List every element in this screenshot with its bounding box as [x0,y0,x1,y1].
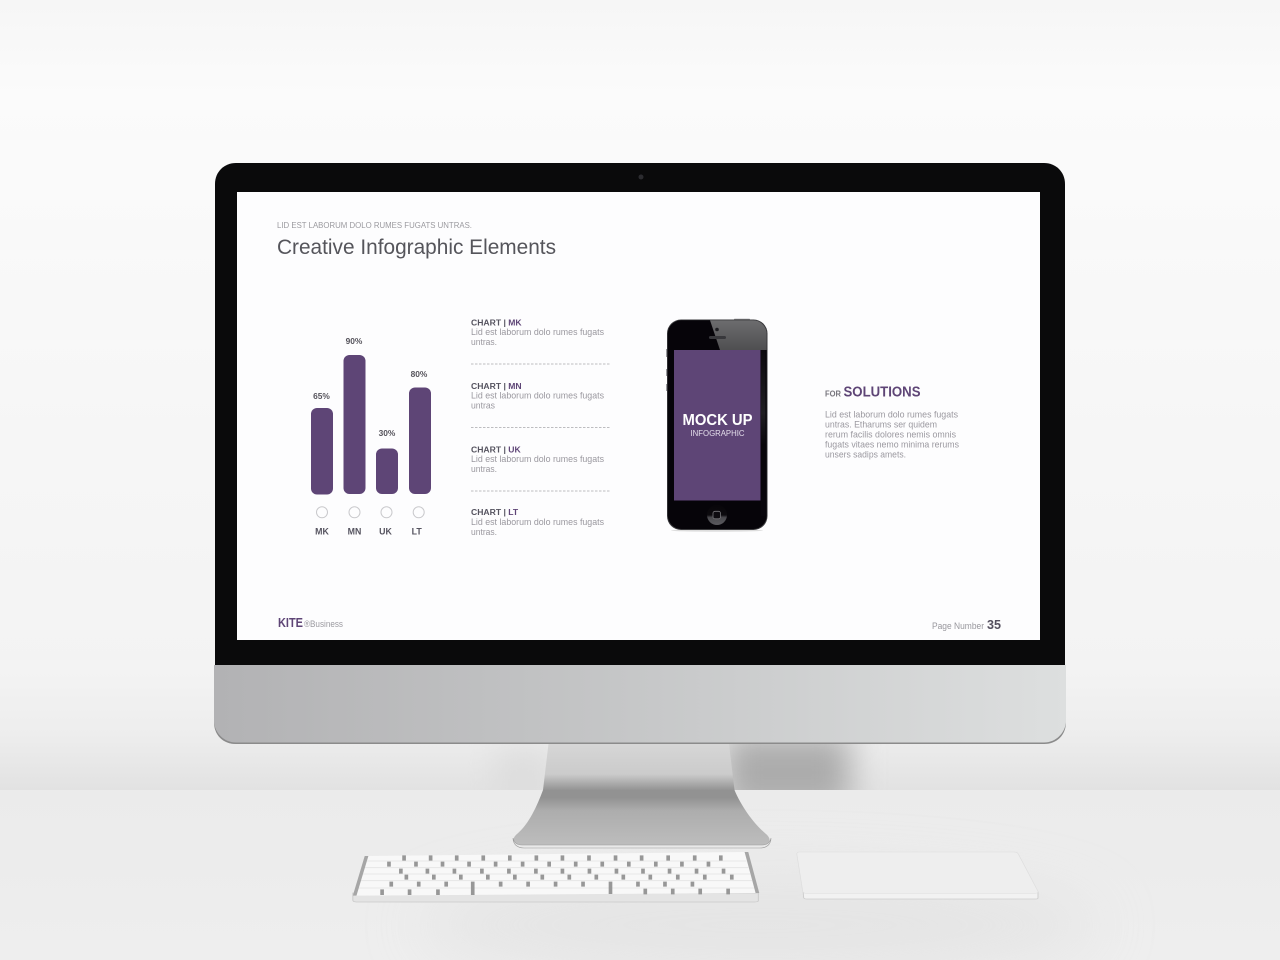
item: chart LT: Lid est laborum dolo rumes fugats [471,517,604,527]
category marker: UK: UK [379,526,392,536]
solutions paragraph [825,410,959,460]
solutions paragraph: unsers sadips amets. [825,450,906,460]
solutions paragraph: fugats vitaes nemo minima rerums [825,440,959,450]
item: chart LT [471,507,604,537]
item: chart UK: CHART | UK [471,444,521,454]
footer brand: KITE [278,616,303,630]
footer page number: Page Number [932,621,984,631]
item: chart UK [471,444,604,474]
solutions paragraph: rerum facilis dolores nemis omnis [825,430,956,440]
bar and value: UK 30%: 30% [379,428,396,438]
category marker: UK [379,507,392,536]
phone ground shadow [671,529,763,532]
phone screen [674,350,760,500]
wall shadow behind stand [517,744,867,790]
item: chart UK: untras. [471,464,497,474]
bar and value: MN 90% [344,336,366,494]
keyboard side edges [353,852,759,896]
item: chart MN: CHART | MN [471,381,522,391]
item: chart LT: untras. [471,527,497,537]
item: chart MN: untras [471,400,495,410]
trackpad top [797,852,1038,893]
item: chart MK: Lid est laborum dolo rumes fugats [471,327,604,337]
category marker: MK: MK [315,526,329,536]
item: chart MK: untras. [471,337,497,347]
background: desk [0,790,1280,960]
solutions heading: FOR [825,388,841,398]
keyboard [353,852,759,902]
item: chart MK: CHART | MK [471,318,522,328]
category marker: LT [412,507,424,536]
item: chart LT: CHART | LT [471,507,519,517]
solutions heading: SOLUTIONS [844,384,921,400]
solutions paragraph: untras. Etharums ser quidem [825,420,937,430]
bar and value: MK 65% [311,391,333,494]
phone side buttons [666,349,667,391]
desk soft shading [623,912,896,938]
monitor stand [513,744,771,848]
keyboard front edge [353,893,758,902]
category marker: MN [348,507,361,536]
screen [237,192,1040,640]
bar chart [311,336,431,536]
monitor black bezel [215,163,1065,666]
monitor chin [214,665,1066,744]
title: Creative Infographic Elements [277,235,556,259]
category marker: MN: MN [348,526,361,536]
item: chart MK [471,318,604,347]
bar and value: LT 80% [409,369,431,494]
phone earpiece and camera [709,328,726,339]
bar and value: MN 90%: 90% [346,336,363,346]
stand base front edge [513,838,771,848]
chin bottom edge [214,722,1066,744]
monitor [214,163,1066,744]
key gaps [380,855,734,895]
phone glare [710,320,767,350]
screen subheading: INFOGRAPHIC [690,428,744,438]
item: chart MN [471,381,604,410]
chart descriptions list [471,318,610,537]
footer page number [932,618,1001,632]
phone top button [734,319,750,320]
bar and value: LT 80%: 80% [411,369,428,379]
footer brand: ®Business [304,619,343,629]
trackpad [797,852,1038,899]
item: chart MN: Lid est laborum dolo rumes fugats [471,390,604,400]
item: chart UK: Lid est laborum dolo rumes fugats [471,454,604,464]
footer brand [278,616,343,630]
key row separators [356,861,755,888]
phone side sheen [761,338,766,516]
eyebrow text: LID EST LABORUM DOLO RUMES FUGATS UNTRAS. [277,220,472,230]
bar and value: UK 30% [376,428,398,494]
slide header [277,220,556,259]
trackpad front edge [803,892,1038,899]
solutions text block [825,384,959,460]
solutions paragraph: Lid est laborum dolo rumes fugats [825,410,958,420]
phone mockup [666,319,768,532]
keyboard body [353,852,757,896]
home button [707,505,727,525]
phone body [668,320,767,529]
camera [638,174,644,180]
screen heading: MOCK UP [682,412,753,429]
bar and value: MK 65%: 65% [313,391,330,401]
stand body [513,744,770,845]
category marker: MK [315,507,329,536]
category marker: LT: LT [412,526,422,536]
phone outline [667,320,768,530]
footer page number: 35 [987,618,1001,632]
